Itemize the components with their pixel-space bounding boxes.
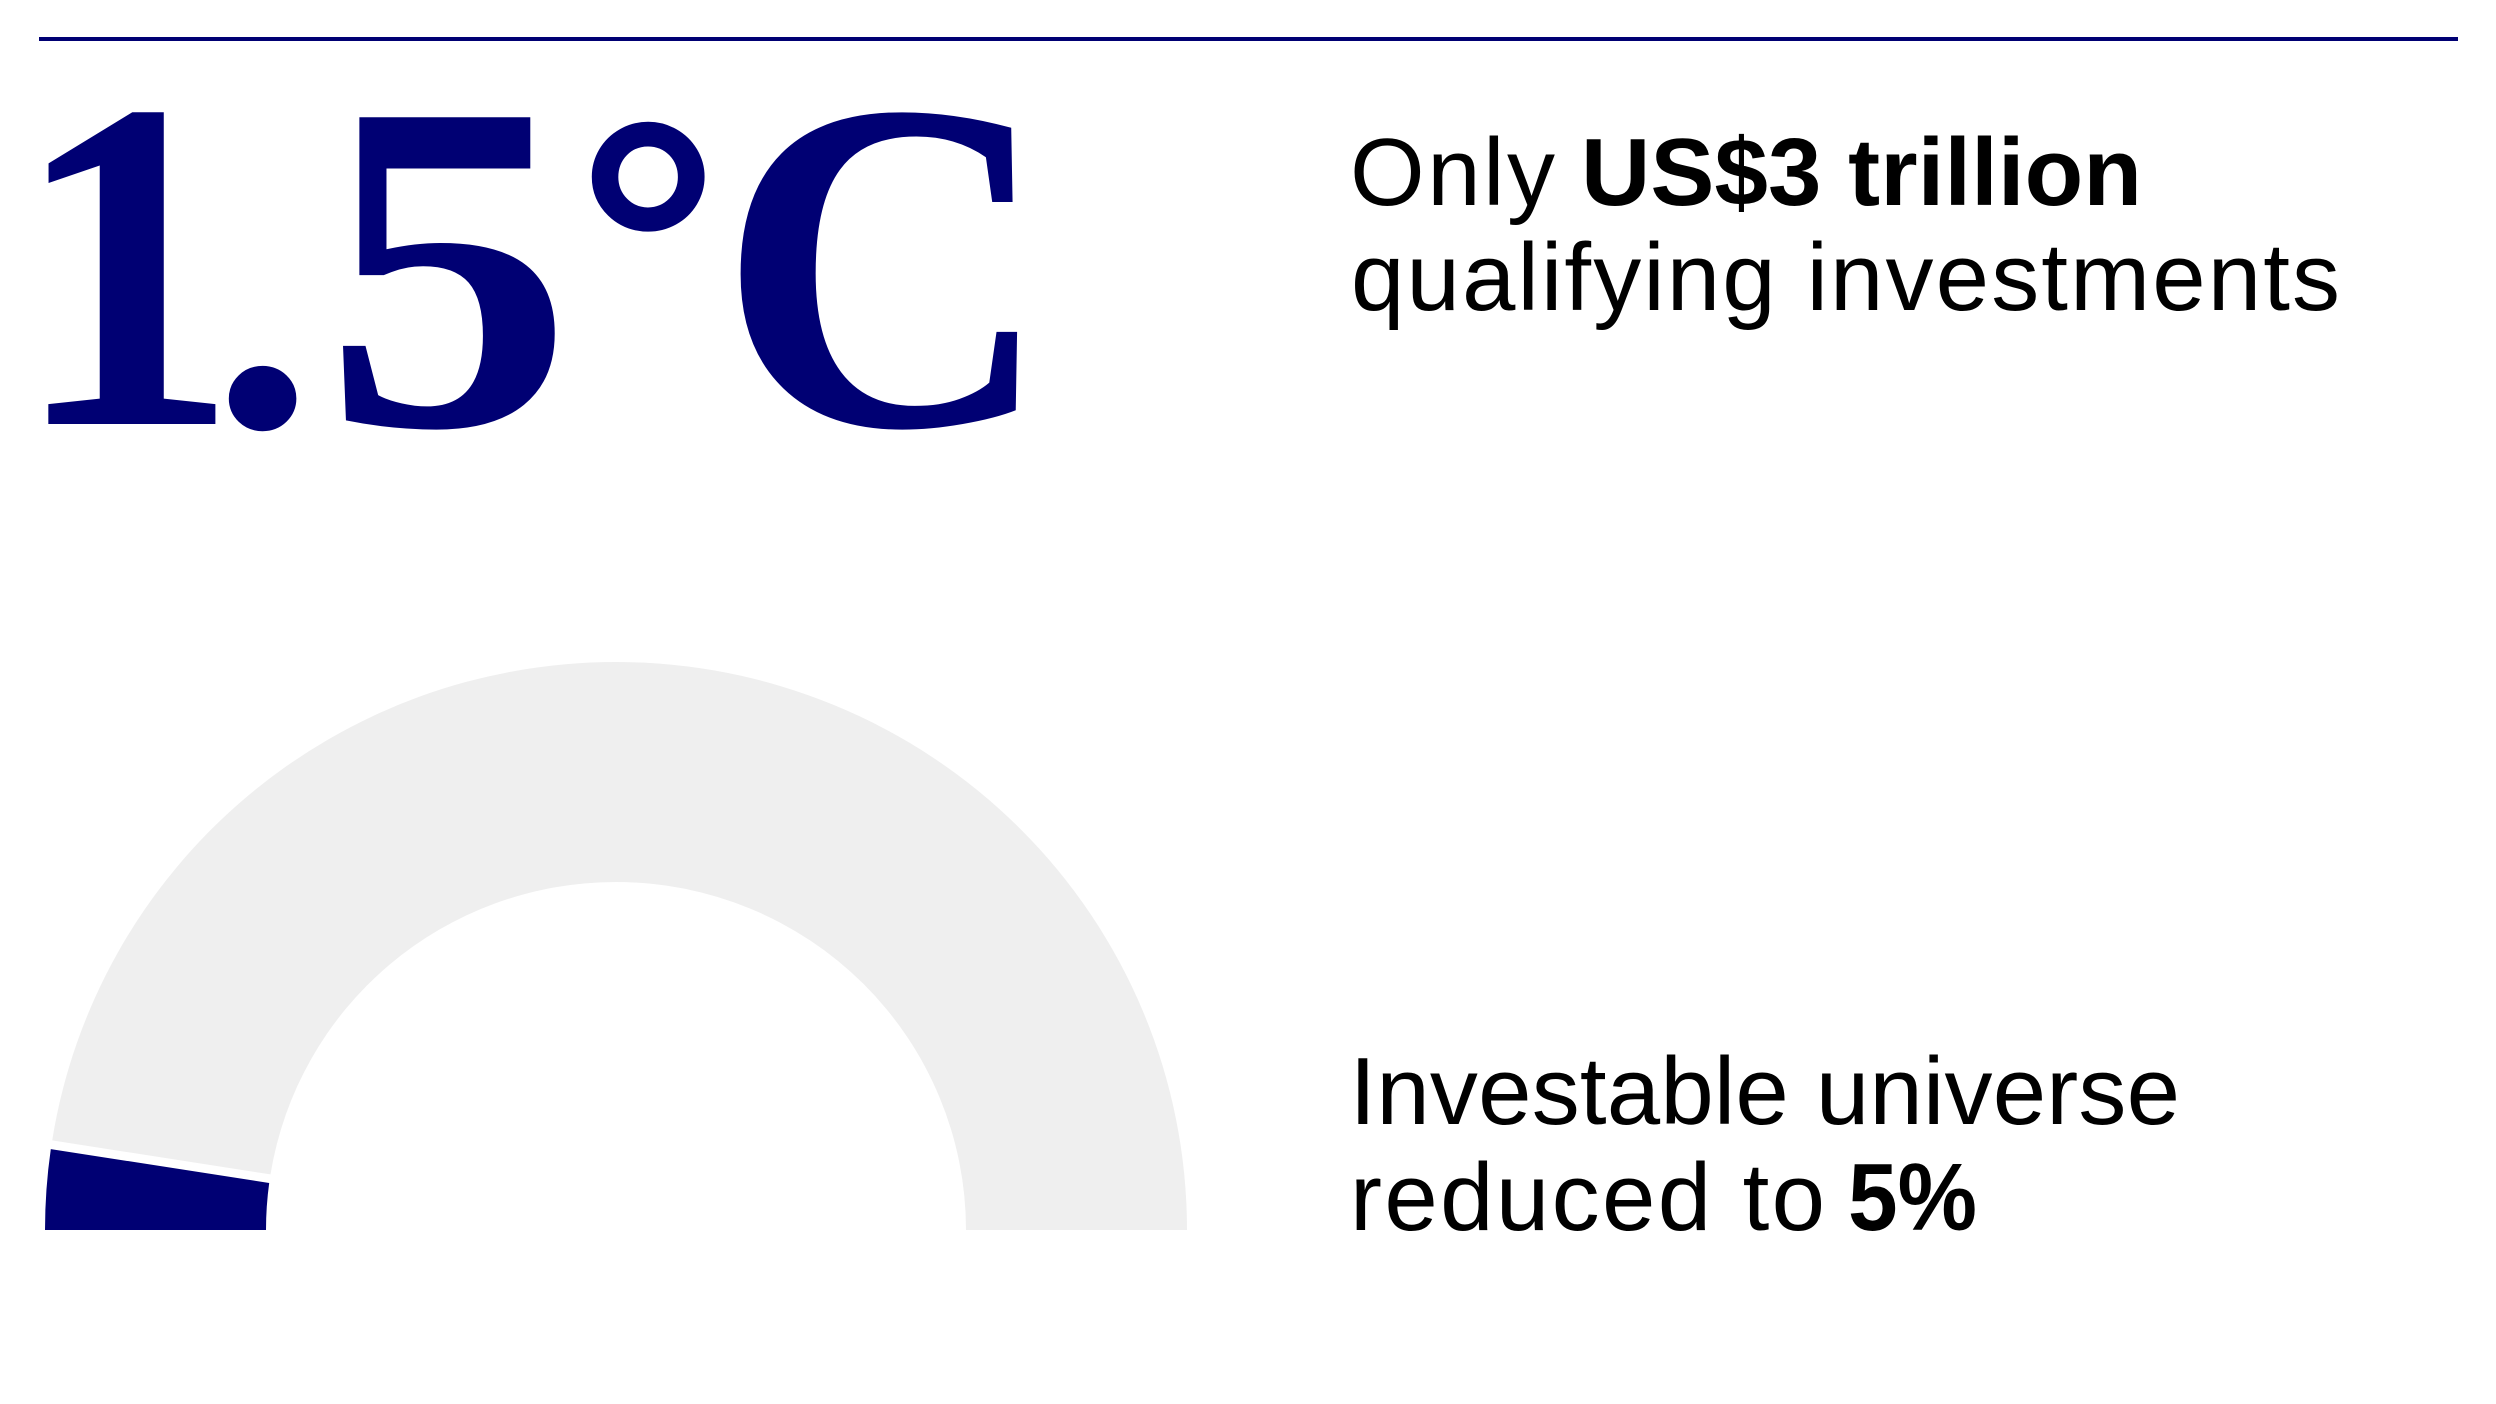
heading: 1.5°C: . xyxy=(210,67,315,513)
text block: qualifying investments: qualifying investments xyxy=(1351,224,2340,331)
text block: qualifying investments xyxy=(1350,119,2340,331)
heading: 1.5°C: ° xyxy=(578,49,719,428)
text block: qualifying investments: Only xyxy=(1350,119,1555,226)
heading: 1.5°C: C xyxy=(718,5,1052,528)
text block: qualifying investments: US$3 trillion xyxy=(1581,119,2142,226)
heading: 1.5°C: 1 xyxy=(12,4,239,527)
text block: investable universe xyxy=(1350,1038,2180,1251)
heading: 1.5°C xyxy=(12,4,1052,528)
gauge 5% segment xyxy=(45,1149,269,1230)
text block: investable universe: Investable universe xyxy=(1350,1038,2180,1145)
heading: 1.5°C: 5 xyxy=(323,7,573,527)
text block: investable universe: reduced to xyxy=(1350,1144,1825,1251)
text block: investable universe: 5% xyxy=(1848,1144,1977,1251)
gauge chart: investable universe 5% xyxy=(45,662,1187,1230)
gauge remainder arc xyxy=(52,662,1187,1230)
